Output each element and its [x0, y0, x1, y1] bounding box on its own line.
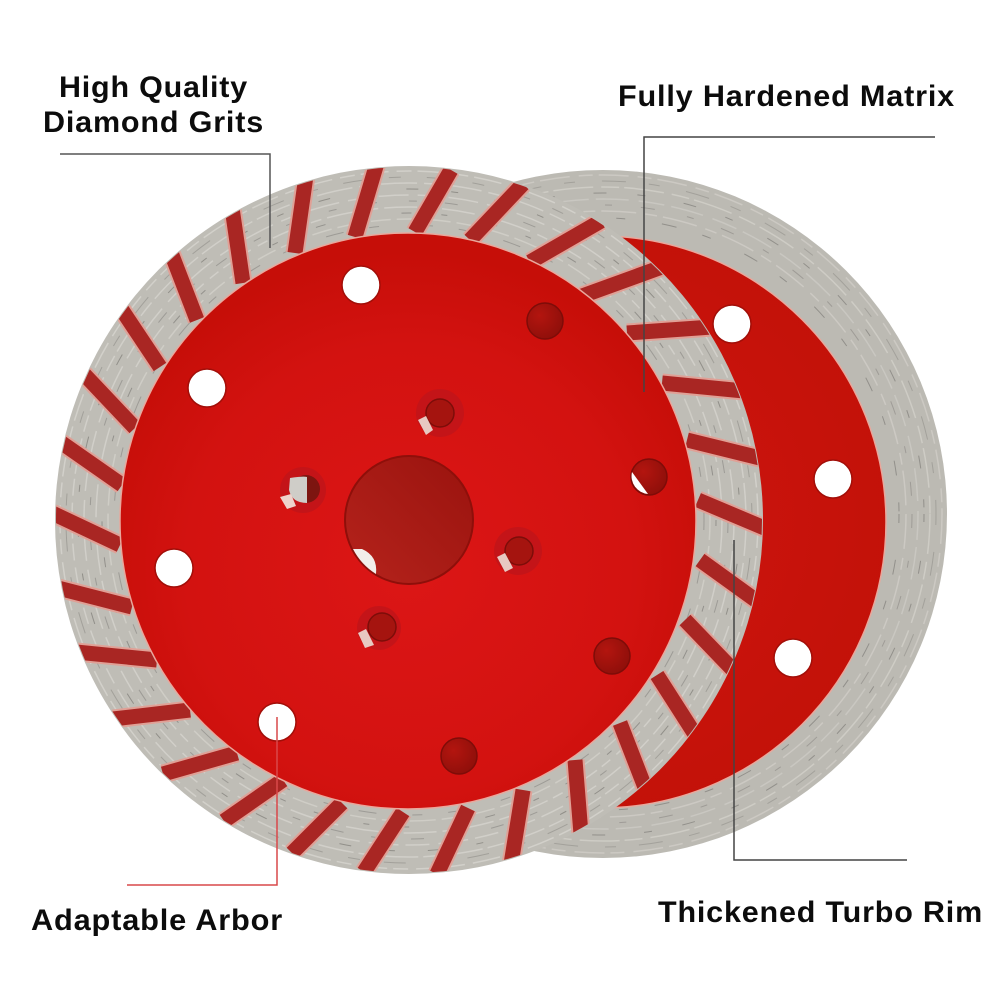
white through holes: [155, 266, 380, 741]
white sliver in right hole: [632, 472, 648, 494]
label: high quality diamond grits: High Quality: [59, 71, 248, 104]
back blade: [259, 170, 947, 858]
turbo segments: [50, 163, 769, 874]
leader line: turbo rim: [734, 540, 907, 860]
countersunk bolt hole right: [494, 527, 542, 575]
back blade holes: [713, 305, 852, 677]
label: thickened turbo rim: Thickened Turbo Rim: [658, 896, 983, 929]
leader line: hardened matrix: [644, 137, 935, 392]
label: high quality diamond grits: Diamond Grits: [43, 106, 264, 139]
back blade rim: [259, 170, 947, 858]
countersunk bolt hole top: [416, 389, 464, 437]
dark through holes: [441, 303, 667, 774]
front blade turbo rim: [55, 166, 763, 874]
leader line: arbor: [127, 717, 277, 885]
label: fully hardened matrix: Fully Hardened Matrix: [618, 80, 955, 113]
front blade red core: [120, 233, 696, 809]
label: high quality diamond grits: [43, 71, 264, 139]
back blade red core: [314, 236, 886, 808]
centre arbor hole: [345, 456, 473, 584]
countersunk bolt hole bottom: [357, 606, 401, 650]
label: adaptable arbor: Adaptable Arbor: [31, 904, 283, 937]
front turbo blade: [50, 163, 769, 874]
countersunk bolt hole left: [280, 467, 326, 513]
leader line: diamond grits: [60, 154, 270, 248]
